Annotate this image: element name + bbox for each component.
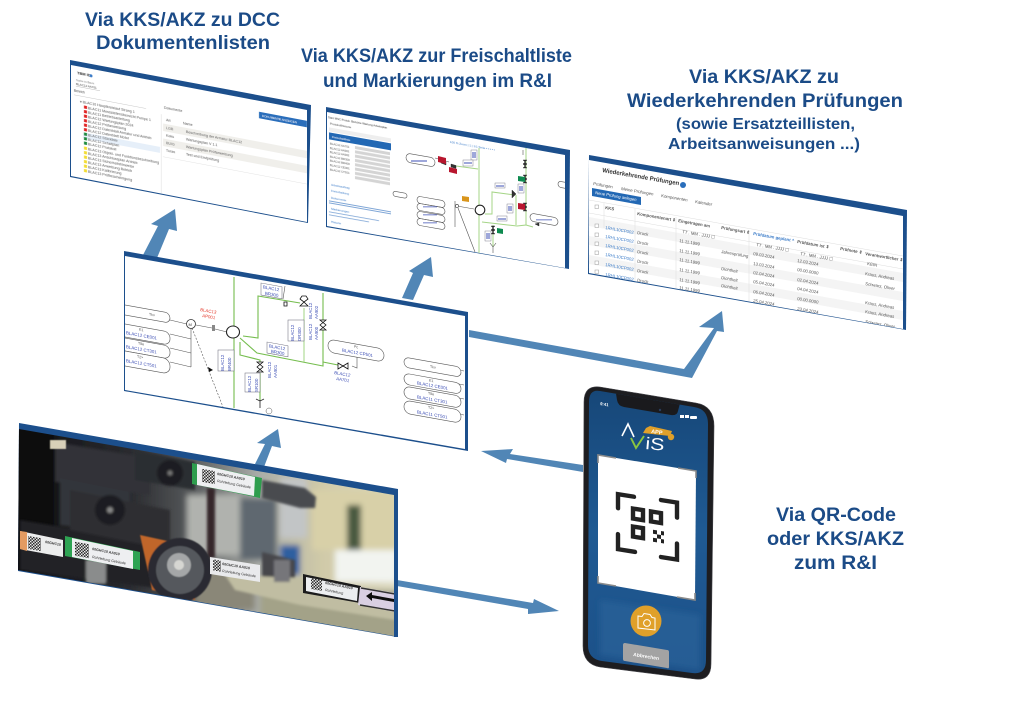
R&I diagram with flags xyxy=(393,147,572,253)
equipment labels: AA901 xyxy=(273,364,278,378)
table header and grid: TT . MM . JJJJ ☐ xyxy=(800,251,833,262)
navigation and sidebar form: BLAC12 CT301 xyxy=(330,167,350,175)
flag markers xyxy=(438,156,525,234)
document tree: BLAC12 Datenblatt Motor xyxy=(88,129,130,141)
table rows: 1RHL10CP002 xyxy=(605,243,635,253)
arrow: photo to R&I xyxy=(255,429,281,467)
product tank xyxy=(328,339,384,362)
equipment labels: BLAC13 xyxy=(200,307,217,315)
table rows: 1RHL10CP002 xyxy=(605,272,635,282)
table header and grid: TT . MM . JJJJ ☐ xyxy=(682,229,715,240)
table header and grid: Verantwortlicher ⇕ xyxy=(865,251,904,263)
table rows: Dichtheit xyxy=(721,283,739,291)
table rows: 00.00.0000 xyxy=(797,296,819,305)
document tree: BLAC11 Betriebsanleitung xyxy=(88,111,130,123)
KKS labels: 00GHC10 AA010 xyxy=(92,547,120,556)
title: QR code to R&I: zum R&I xyxy=(794,552,877,574)
equipment labels: BLAC12 xyxy=(263,284,280,292)
equipment labels: BLAC12 xyxy=(290,324,295,341)
table rows: Kraus, Andreas xyxy=(865,271,895,281)
left tank group: BLAC12 CE001 xyxy=(126,330,158,341)
equipment labels: AA701 xyxy=(336,376,350,383)
equipment labels xyxy=(200,283,351,392)
panel: recurring inspections screen xyxy=(588,155,907,330)
table rows: 05.04.2024 xyxy=(753,279,775,288)
equipment labels: BR400 xyxy=(227,357,232,371)
table rows: Druck xyxy=(637,240,650,247)
navigation and sidebar form: Protokollhistorie xyxy=(330,122,352,129)
header and search: BLAC12 AA701 xyxy=(76,82,97,90)
navigation and sidebar form: BLAC12 AA901 xyxy=(330,146,350,153)
right tank group: T8e xyxy=(428,391,434,396)
KKS labels: 00GHC10 AA010 xyxy=(325,581,353,590)
document table: Dokumente xyxy=(164,106,182,113)
document table: DOKUMENTE ANZEIGEN xyxy=(262,114,297,124)
document tree: BLAC11 Messstellenübersicht Pumpe 1 xyxy=(88,106,151,122)
KKS labels: Rohrleitung Gebäude xyxy=(217,479,251,490)
table rows: 12.03.2024 xyxy=(797,258,819,267)
title: recurring inspections xyxy=(627,66,903,153)
equipment labels: AA900 xyxy=(314,326,319,340)
table rows: 04.04.2024 xyxy=(797,286,819,295)
valves xyxy=(257,296,348,372)
tabs and add button: Komponenten xyxy=(661,193,689,203)
machinery xyxy=(20,442,395,620)
table rows: 1RHL10CP002 xyxy=(605,234,635,244)
title: DCC document lists: Dokumentenlisten xyxy=(96,32,270,54)
document tree: BLAC13 Kalibrierung xyxy=(88,165,122,176)
diagram toolbar: 100 % Zoom | 1 | 1/1 Seite ▪ ▪ ▪ ▪ ▪ xyxy=(450,140,495,152)
equipment labels: SR100 xyxy=(254,378,259,392)
row checkboxes xyxy=(595,205,598,274)
title: recurring inspections: Wiederkehrenden Prüfungen xyxy=(627,90,903,112)
title: QR code to R&I: Via QR-Code xyxy=(776,504,896,526)
table rows: 11.11.1999 xyxy=(679,248,701,257)
cancel button: Abbrechen xyxy=(633,652,659,662)
left tank group: BLAC12 CT301 xyxy=(126,344,157,355)
table rows: 06.04.2024 xyxy=(753,289,775,298)
table header and grid: TT . MM . JJJJ ☐ xyxy=(756,242,789,253)
navigation and sidebar form: BLAC12 BR400 xyxy=(330,159,350,166)
title: QR code to R&I: oder KKS/AKZ xyxy=(767,528,904,550)
left tank group: T8e xyxy=(138,341,144,346)
document tree xyxy=(80,100,160,187)
document tree: BLAC12 Schaltplan xyxy=(88,138,119,148)
status bar xyxy=(600,401,697,419)
product tank: BLAC12 CP501 xyxy=(342,348,374,358)
document table: Turas xyxy=(166,149,175,154)
navigation and sidebar form: Historie xyxy=(331,220,341,226)
title: isolation list: Via KKS/AKZ zur Freischaltliste xyxy=(301,45,572,67)
tabs and add button: Prüfungen xyxy=(593,181,614,189)
table header and grid: Prüfungsart ⇕ xyxy=(721,225,750,235)
status bar: 9:41 xyxy=(600,401,610,407)
table rows xyxy=(605,225,896,329)
equipment labels: BR300 xyxy=(265,291,279,298)
document tree: ▾ BLAC10 Hauptkreislauf Strang 1 xyxy=(80,100,135,114)
document table: Name xyxy=(183,121,193,127)
table rows: 11.11.1999 xyxy=(679,277,701,286)
right tank group: BLAC11 CT301 xyxy=(417,394,448,405)
document tree: BLAC13 Objekt- und Funktionsbeschreibung xyxy=(88,147,159,165)
table rows: Schwarz, Oliver xyxy=(865,319,896,329)
table rows: 02.04.2024 xyxy=(797,277,819,286)
phone screen xyxy=(588,390,708,674)
camera button xyxy=(630,606,662,636)
pump and measuring point xyxy=(186,320,272,414)
document tree: BLAC12 Prüfanweisung xyxy=(88,120,126,131)
header and search xyxy=(74,70,146,109)
table rows: Druck xyxy=(637,259,650,266)
navigation and sidebar form xyxy=(328,115,391,234)
phone xyxy=(583,385,714,680)
equipment labels: BLAC12 xyxy=(308,323,313,340)
table header and grid: Prüfdatum ist ⇕ xyxy=(797,239,830,250)
KKS labels: 00GHC10 AA010 xyxy=(217,472,245,481)
equipment labels: DR300 xyxy=(297,327,302,341)
navigation and sidebar form: BLAC12 BR300 xyxy=(330,154,350,162)
document tree: BLAC13 Prüfbescheinigung xyxy=(88,170,132,182)
document table: LGB xyxy=(166,126,174,132)
table rows: Druck xyxy=(637,230,650,237)
navigation and sidebar form: BLAC12 CE001 xyxy=(330,163,350,171)
KKS labels: Rohrleitung Gebäude xyxy=(222,569,256,578)
table rows: 11.11.1999 xyxy=(679,285,701,294)
table rows: 11.11.1999 xyxy=(679,257,701,266)
left tank group: Tkv xyxy=(149,312,155,317)
table header and grid: KKS xyxy=(605,205,615,212)
KKS labels: 00GHC10 AA010 xyxy=(222,562,250,570)
document table: BUIG xyxy=(166,141,175,147)
right tank group: Tkv xyxy=(430,365,436,370)
app logo xyxy=(622,424,674,455)
tabs and add button xyxy=(592,181,713,207)
table rows: Schwarz, Oliver xyxy=(865,281,896,291)
navigation and sidebar form: Start MSC Protok. Berichte Wartung Arbeitsplan xyxy=(328,115,388,130)
table header and grid: KEIN xyxy=(867,261,878,268)
screen heading: Wiederkehrende Prüfungen xyxy=(602,167,680,187)
app logo: iS xyxy=(645,434,665,455)
product tank: Pc xyxy=(354,345,358,349)
document table: Beschreibung der Armatur BLAC12 xyxy=(186,130,242,145)
phone body xyxy=(583,387,714,679)
arrow: R&I to DCC document lists xyxy=(143,209,177,258)
equipment labels: BLAC12 xyxy=(220,354,225,371)
app logo: APP xyxy=(651,429,663,437)
title: DCC document lists: Via KKS/AKZ zu DCC xyxy=(85,9,280,31)
table rows: 23.04.2024 xyxy=(797,306,819,315)
equipment labels: AP001 xyxy=(202,313,216,320)
document tree: BLAC12 Stückliste xyxy=(88,133,118,143)
table rows: 09.03.2024 xyxy=(753,251,775,260)
right tank group: T2> xyxy=(428,405,434,410)
right tank group: BLAC11 CT501 xyxy=(417,409,448,420)
document table: Art xyxy=(166,118,171,123)
table header and grid xyxy=(589,200,904,302)
tabs and add button: Meine Prüfungen xyxy=(621,186,655,197)
divider xyxy=(161,114,162,194)
title: isolation list: und Markierungen im R&I xyxy=(323,70,552,92)
grey connection lines xyxy=(170,286,464,415)
arrow: phone to R&I xyxy=(481,449,583,472)
arrow: photo to phone xyxy=(397,580,559,614)
cancel button xyxy=(623,643,669,668)
table stripes xyxy=(589,217,903,320)
table rows: Druck xyxy=(637,268,650,275)
tabs and add button: Kalender xyxy=(695,199,713,207)
equipment labels: BLAC12 xyxy=(267,361,272,378)
document tree: BLAC12 Protokoll xyxy=(88,142,117,152)
header and search: Suche im Baum xyxy=(76,78,94,85)
document table xyxy=(163,106,307,184)
panel: plant photo with KKS labels xyxy=(10,420,410,645)
table header and grid: Komponentenart ⇕ xyxy=(637,211,676,223)
table rows: 1RHL10CP002 xyxy=(605,262,635,272)
equipment labels: BLAC12 xyxy=(308,302,313,319)
table rows: Kraus, Andreas xyxy=(865,300,895,310)
document table: Wartungsplan V 1.1 xyxy=(186,137,217,147)
navigation and sidebar form: BLAC12 AA902 xyxy=(330,150,350,158)
document tree: BLAC12 Datenblatt Armatur und Antrieb xyxy=(88,124,152,140)
table rows: 11.11.1999 xyxy=(679,238,701,247)
table rows: 1RHL10CP002 xyxy=(605,252,635,262)
table header and grid: Eingetragen am xyxy=(678,218,711,229)
green process lines xyxy=(234,277,338,408)
equipment labels: AA902 xyxy=(314,305,319,319)
KKS labels: Rohrleitung Gebäude xyxy=(92,555,126,566)
tabs and add button: Neue Prüfung anlegen xyxy=(595,190,638,202)
table rows: Dichtheit xyxy=(721,266,739,274)
navigation and sidebar form: Arbeitsauftrag xyxy=(331,183,350,190)
table rows: Dichtheit xyxy=(721,275,739,283)
equipment labels: BLAC12 xyxy=(334,370,351,378)
panel: isolation list and P&I markings screen xyxy=(326,107,572,269)
table rows: Kraus, Andreas xyxy=(865,309,895,319)
table header and grid: Prüfdatum geplant ^ xyxy=(753,231,795,243)
table rows: Jahresprüfung xyxy=(721,249,749,259)
document tree: BLAC13 Anweisung Betrieb xyxy=(88,161,132,173)
equipment labels: BLAC12 xyxy=(247,375,252,392)
document table: Test und Erstprüfung xyxy=(186,152,219,163)
title: recurring inspections: (sowie Ersatzteillisten, xyxy=(676,116,855,133)
navigation and sidebar form: Dokumente xyxy=(331,196,347,202)
document tree: BLAC13 Sicherheitshinweise xyxy=(88,156,134,169)
notch xyxy=(616,394,680,416)
left tank group: E1 xyxy=(139,328,143,332)
title: QR code to R&I xyxy=(767,504,904,574)
table rows: 02.04.2024 xyxy=(753,270,775,279)
arrow: R&I to recurring inspections xyxy=(469,311,724,378)
panel: DCC document list screen xyxy=(70,60,311,223)
table rows: Druck xyxy=(637,249,650,256)
table rows: 25.04.2024 xyxy=(753,298,775,307)
header and search: Bereich xyxy=(74,89,85,95)
navigation and sidebar form: Markierungen xyxy=(331,207,350,214)
KKS labels: Rohrleitung xyxy=(325,588,344,595)
header and search: TBM ID xyxy=(77,70,91,78)
KKS labels: 00GHC10 xyxy=(45,540,61,547)
table rows: 1RHL10CP002 xyxy=(605,225,635,235)
left tank group: BLAC12 CT501 xyxy=(126,358,157,369)
table rows: 13.03.2024 xyxy=(753,261,775,270)
document tree: BLAC13 Anschlussplan Antrieb xyxy=(88,152,138,165)
handwheel xyxy=(140,535,212,602)
table rows: 00.00.0000 xyxy=(797,267,819,276)
title: DCC document lists xyxy=(85,9,280,54)
equipment labels: BLAC12 xyxy=(269,343,286,351)
document tree: BLAC12 Wartungsplan 2024 xyxy=(88,115,133,128)
QR scan card xyxy=(598,455,696,600)
left tank group xyxy=(125,304,170,374)
title: recurring inspections: Via KKS/AKZ zu xyxy=(689,66,839,88)
table header and grid: Prüfnote ⇕ xyxy=(840,246,863,255)
left tank group: T2> xyxy=(137,355,143,360)
navigation and sidebar form: BLAC12 AA701 xyxy=(330,142,350,149)
right tank group: E1 xyxy=(429,379,433,383)
table rows: Druck xyxy=(637,278,650,285)
navigation and sidebar form: Freischaltung xyxy=(331,189,349,196)
right tank group: BLAC12 CE001 xyxy=(417,380,449,391)
title: isolation list xyxy=(301,45,572,92)
navigation and sidebar form: Freischaltliste xyxy=(332,135,351,142)
blurred plant background xyxy=(18,429,394,636)
equipment labels: BR300 xyxy=(271,349,285,356)
document table: Koks xyxy=(166,134,174,139)
title: recurring inspections: Arbeitsanweisungen ...) xyxy=(668,136,860,153)
arrow: R&I to isolation list xyxy=(402,257,433,300)
right tank group xyxy=(404,357,461,423)
panel: R&I diagram xyxy=(115,251,468,451)
pump and measuring point: M xyxy=(188,322,192,327)
table rows: 11.11.1999 xyxy=(679,267,701,276)
KKS labels xyxy=(20,463,395,612)
document table: Wartungsplan Prüfanweisung xyxy=(186,145,233,158)
